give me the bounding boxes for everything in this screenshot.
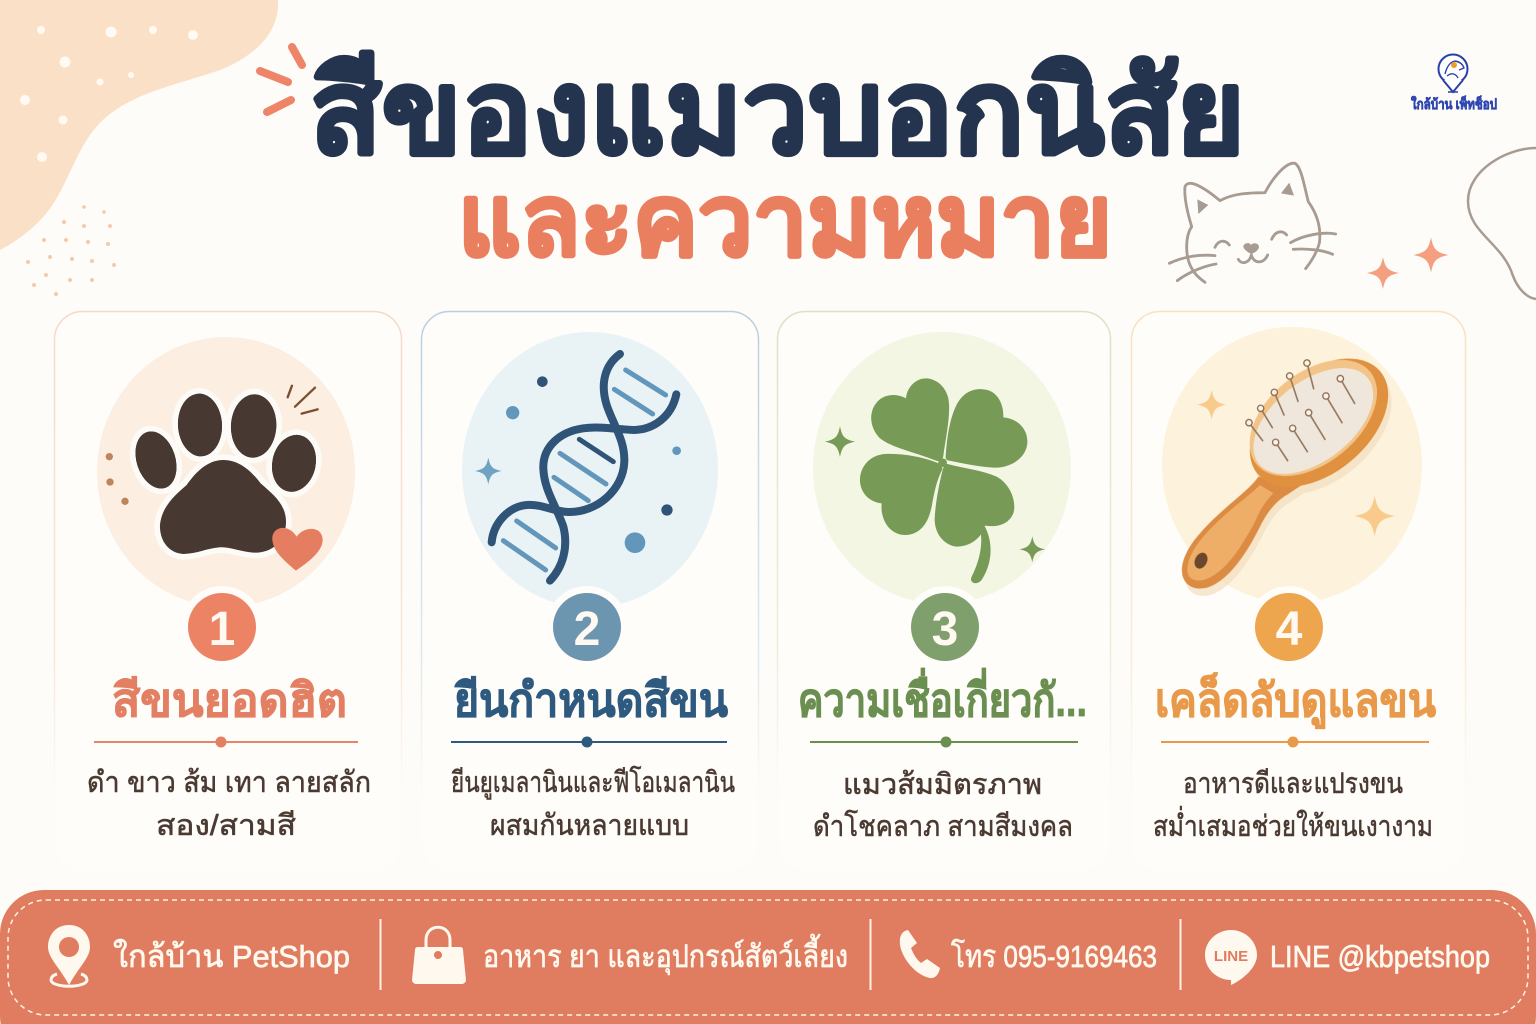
number badge 1 [181,586,263,668]
body text [813,769,1073,843]
panel: beliefs [778,312,1110,872]
logo: pet shop pin [1411,54,1497,112]
brush handle [1182,477,1303,589]
icon circle [462,332,718,608]
icon: wooden brush [1182,333,1416,596]
icon: location pin [48,925,90,986]
icon: phone [900,930,940,978]
decorative outline blob: right edge [1468,148,1536,299]
icon: LINE bubble [1205,930,1257,985]
body text: แมวส้มมิตรภาพ [843,769,1042,801]
text: products: อาหาร ยา และอุปกรณ์สัตว์เลี้ยง [483,934,848,976]
rule [810,736,1078,748]
number badge 4: 4 [1276,603,1303,656]
body text [1153,768,1433,843]
heading: สีขนยอดฮิต [112,674,347,726]
icon: paw with heart [106,386,323,571]
number badge 4 [1248,586,1330,668]
heading: เคล็ดลับดูแลขน [1155,672,1436,729]
body text: ดำ ขาว ส้ม เทา ลายสลัก [87,767,371,799]
title: สีของแมวบอกนิสัย [310,47,1245,179]
illustration: smiling cat [1169,163,1336,282]
title [310,47,1245,277]
rule [451,736,727,748]
sparkles near cat [1367,238,1448,289]
icon circle [1162,327,1422,603]
heading: ความเชื่อเกี่ยวกั... [798,668,1087,726]
body text: สอง/สามสี [156,810,296,842]
body text: อาหารดีและแปรงขน [1183,768,1403,800]
accent sparks beside title [260,47,302,112]
body text [451,765,735,842]
icon: LINE bubble: LINE [1214,948,1248,965]
body text: ดำโชคลาภ สามสีมงคล [813,809,1073,843]
body text: สม่ำเสมอช่วยให้ขนเงางาม [1153,806,1433,843]
brush head [1226,333,1412,512]
panel: what determines coat colour [422,312,758,872]
heading: ยีนกำหนดสีขน [454,674,729,726]
footer bar [0,890,1536,1024]
icon: four-leaf clover [825,378,1045,583]
text: LINE: LINE @kbpetshop [1270,939,1490,974]
logo: pet shop pin: ใกล้บ้าน เพ็ทช็อป [1411,95,1497,112]
icon circle [813,332,1071,604]
number badge 1: 1 [209,603,235,656]
icon: shopping bag [412,927,466,984]
panel: grooming tips [1132,312,1466,872]
body text: ผสมกันหลายแบบ [490,810,689,842]
number badge 2 [546,586,628,668]
decorative blob: top left [0,0,278,296]
body text: ยีนยูเมลานินและฟีโอเมลานิน [451,765,735,800]
number badge 3 [904,586,986,668]
text: shop name: ใกล้บ้าน PetShop [113,939,350,974]
icon circle [97,337,355,607]
text: phone: โทร 095-9169463 [951,939,1157,974]
panel: popular coat colours [54,312,402,872]
brush shadow [1185,340,1416,596]
rule [1161,736,1429,748]
body text [87,767,371,842]
title: และความหมาย [458,165,1112,277]
number badge 3: 3 [932,603,958,656]
icon: DNA helix [475,354,681,581]
rule [94,736,358,748]
number badge 2: 2 [574,603,600,656]
